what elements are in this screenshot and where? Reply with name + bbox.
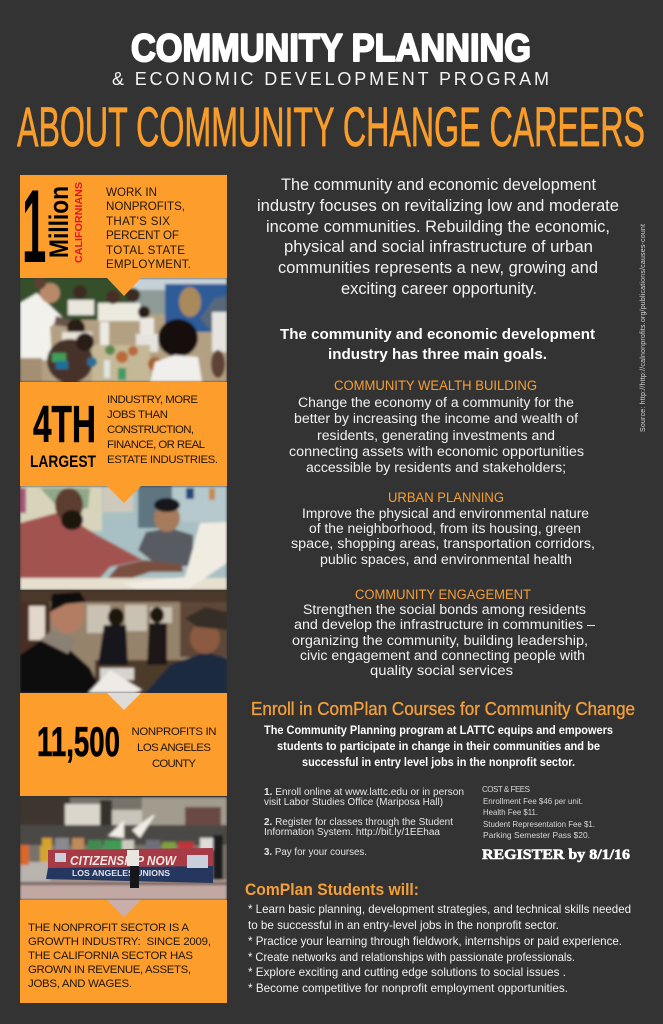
stat description: CONSTRUCTION, bbox=[107, 424, 194, 436]
stat description bbox=[28, 922, 211, 990]
banner: LOS ANGELES UNIONS bbox=[72, 869, 171, 878]
stat description: PERCENT OF bbox=[106, 229, 179, 242]
student outcomes list: * Practice your learning through fieldwork, internships or paid experience. bbox=[248, 934, 622, 948]
4TH: 4TH bbox=[33, 396, 96, 454]
banner: CITIZENSHIP NOW bbox=[70, 853, 178, 868]
enroll description bbox=[264, 725, 613, 769]
stat description: GROWTH INDUSTRY: SINCE 2009, bbox=[28, 936, 211, 948]
11,500: 11,500 bbox=[37, 718, 120, 765]
student outcomes list: * Explore exciting and cutting edge solutions to social issues . bbox=[248, 965, 566, 979]
goal: community engagement: COMMUNITY ENGAGEMENT bbox=[355, 587, 531, 602]
goal: community wealth building: residents, generating investments and bbox=[317, 428, 555, 443]
stat description bbox=[107, 394, 218, 466]
goal: community engagement: Strengthen the social bonds among residents bbox=[303, 602, 586, 617]
stat description: ESTATE INDUSTRIES. bbox=[107, 454, 218, 466]
student outcomes list: * Learn basic planning, development strategies, and technical skills needed bbox=[248, 902, 631, 916]
photo: two men talking with newspaper bbox=[20, 590, 227, 693]
stat description: THE NONPROFIT SECTOR IS A bbox=[28, 922, 189, 934]
panel: 4th largest stat bbox=[20, 382, 227, 503]
panel: 11,500 nonprofits stat bbox=[20, 693, 227, 796]
goal: community wealth building: better by increasing the income and wealth of bbox=[294, 411, 578, 426]
goal: urban planning: public spaces, and environmental health bbox=[320, 552, 572, 567]
stat description: EMPLOYMENT. bbox=[106, 258, 191, 271]
stat description: GROWN IN REVENUE, ASSETS, bbox=[28, 964, 191, 976]
cost and fees: Parking Semester Pass $20. bbox=[483, 830, 590, 840]
stat description: THE CALIFORNIA SECTOR HAS bbox=[28, 950, 193, 962]
stat description: NONPROFITS, bbox=[106, 200, 185, 213]
stat description bbox=[132, 726, 216, 770]
goal: urban planning bbox=[291, 490, 595, 567]
Million: Million bbox=[44, 186, 74, 258]
enroll description: students to participate in change in their communities and be bbox=[277, 741, 600, 753]
source note: Source: http://http://calnonprofits.org/publications/causes-count bbox=[640, 224, 647, 432]
goals heading: The community and economic development bbox=[280, 326, 595, 343]
goal: urban planning: Improve the physical and environmental nature bbox=[302, 506, 589, 521]
intro paragraph: physical and social infrastructure of urban bbox=[284, 238, 593, 256]
goal: community engagement: quality social services bbox=[370, 663, 513, 678]
cost and fees: COST & FEES bbox=[482, 785, 530, 794]
stat description: NONPROFITS IN bbox=[132, 726, 216, 738]
goal: urban planning: URBAN PLANNING bbox=[388, 490, 504, 505]
intro paragraph: income communities. Rebuilding the economic, bbox=[266, 218, 610, 236]
student outcomes list bbox=[248, 902, 631, 995]
photo: two men at a laptop bbox=[20, 486, 227, 590]
register deadline: REGISTER by 8/1/16 bbox=[482, 847, 631, 863]
cost and fees: Student Representation Fee $1. bbox=[483, 819, 595, 829]
stat description: COUNTY bbox=[152, 758, 196, 770]
big number 1: 1 bbox=[22, 168, 46, 284]
intro paragraph bbox=[257, 176, 619, 298]
stat description: JOBS, AND WAGES. bbox=[28, 978, 132, 990]
stat description: LOS ANGELES bbox=[137, 742, 211, 754]
stat description: JOBS THAN bbox=[107, 409, 168, 421]
enroll description: successful in entry level jobs in the nonprofit sector. bbox=[302, 757, 575, 769]
goal: community engagement: organizing the community, building leadership, bbox=[292, 633, 588, 648]
stat description: TOTAL STATE bbox=[106, 244, 185, 257]
LARGEST: LARGEST bbox=[30, 452, 96, 471]
goal: community wealth building: accessible by residents and stakeholders; bbox=[306, 460, 566, 475]
stat description: THAT'S SIX bbox=[106, 215, 170, 228]
stat description: WORK IN bbox=[106, 186, 157, 199]
goal: urban planning: of the neighborhood, from its housing, green bbox=[309, 521, 581, 536]
enrollment steps: Information System. http://bit.ly/1EEhaa bbox=[264, 826, 440, 838]
stat description: INDUSTRY, MORE bbox=[107, 394, 198, 406]
goal: community wealth building: Change the economy of a community for the bbox=[298, 395, 574, 410]
subtitle: & ECONOMIC DEVELOPMENT PROGRAM bbox=[112, 69, 549, 89]
photo: volunteers painting pots bbox=[20, 277, 227, 383]
goal: community wealth building: connecting assets with economic opportunities bbox=[289, 444, 584, 459]
enrollment steps bbox=[264, 786, 464, 858]
intro paragraph: exciting career opportunity. bbox=[341, 280, 537, 298]
enroll description: The Community Planning program at LATTC equips and empowers bbox=[264, 725, 613, 737]
photo: citizenship march banner bbox=[20, 797, 227, 900]
enroll heading: Enroll in ComPlan Courses for Community Change bbox=[251, 698, 635, 719]
goal: community wealth building bbox=[289, 378, 584, 475]
goals heading: industry has three main goals. bbox=[328, 346, 547, 363]
intro paragraph: industry focuses on revitalizing low and moderate bbox=[257, 197, 619, 215]
title: COMMUNITY PLANNING bbox=[131, 27, 531, 70]
student outcomes list: to be successful in an entry-level jobs in the nonprofit sector. bbox=[248, 918, 559, 932]
goals heading bbox=[280, 326, 595, 363]
panel: growth industry stat bbox=[20, 900, 227, 1003]
enrollment steps: 1. Enroll online at www.lattc.edu or in person bbox=[264, 786, 464, 798]
stat description: FINANCE, OR REAL bbox=[107, 439, 205, 451]
enrollment steps: 3. Pay for your courses. bbox=[264, 846, 367, 858]
goal: community engagement bbox=[292, 587, 596, 678]
enrollment steps: 2. Register for classes through the Student bbox=[264, 816, 453, 828]
goal: community wealth building: COMMUNITY WEALTH BUILDING bbox=[334, 378, 537, 393]
stat description bbox=[106, 186, 191, 271]
Californians: CALIFORNIANS bbox=[74, 182, 85, 263]
cost and fees: Enrollment Fee $46 per unit. bbox=[483, 796, 583, 806]
students heading: ComPlan Students will: bbox=[245, 881, 419, 899]
intro paragraph: The community and economic development bbox=[281, 176, 596, 194]
goal: urban planning: space, shopping areas, transportation corridors, bbox=[291, 536, 595, 551]
intro paragraph: communities represents a new, growing and bbox=[278, 259, 598, 277]
goal: community engagement: civic engagement and connecting people with bbox=[300, 648, 585, 663]
cost and fees: Health Fee $11. bbox=[483, 807, 538, 817]
cost and fees bbox=[482, 785, 595, 840]
student outcomes list: * Become competitive for nonprofit employment opportunities. bbox=[248, 981, 568, 995]
student outcomes list: * Create networks and relationships with passionate professionals. bbox=[248, 950, 575, 964]
banner bbox=[46, 848, 213, 888]
enrollment steps: visit Labor Studies Office (Mariposa Hall) bbox=[264, 796, 443, 808]
panel: 1 million stat bbox=[20, 168, 227, 296]
goal: community engagement: and develop the infrastructure in communities – bbox=[294, 617, 596, 632]
